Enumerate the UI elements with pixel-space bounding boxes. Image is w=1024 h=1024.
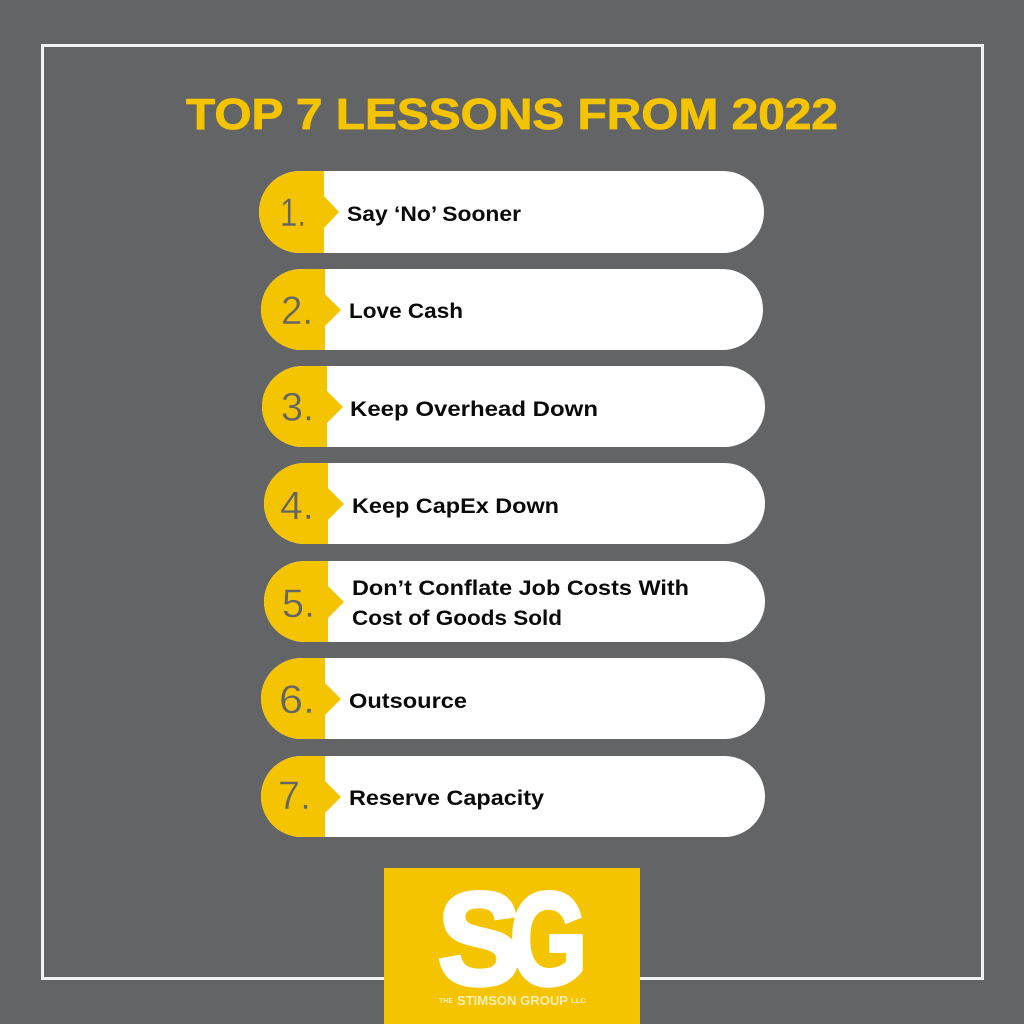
lesson 7: 7. (278, 774, 311, 818)
lesson 1: Say ‘No’ Sooner (347, 202, 522, 226)
lesson 6 (261, 658, 765, 739)
lesson 3: 3. (281, 386, 314, 430)
lesson 6: Outsource (349, 689, 467, 713)
lesson 2: 2. (281, 289, 313, 333)
logo wordmark: STIMSON GROUP (457, 993, 568, 1008)
logo monogram: S (438, 865, 521, 1012)
lesson 3: Keep Overhead Down (350, 397, 598, 421)
lesson 2: Love Cash (349, 299, 463, 323)
lesson 5: Cost of Goods Sold (352, 606, 562, 630)
lesson 5: 5. (282, 582, 315, 626)
title: TOP 7 LESSONS FROM 2022 (186, 90, 838, 139)
lesson 2 (261, 269, 763, 350)
lesson 5: Don’t Conflate Job Costs With (352, 576, 689, 600)
lesson 4: 4. (280, 484, 314, 528)
lesson 4: Keep CapEx Down (352, 494, 559, 518)
lesson 6: 6. (279, 678, 315, 722)
lesson list (259, 171, 765, 837)
logo wordmark: THE (439, 998, 453, 1005)
lesson 4 (264, 463, 765, 544)
logo wordmark: LLC (571, 998, 586, 1005)
lesson 7 (261, 756, 765, 837)
lesson 1: 1. (280, 191, 306, 235)
lesson 7: Reserve Capacity (349, 786, 544, 810)
logo block (384, 865, 640, 1024)
logo monogram: G (510, 865, 587, 1012)
logo monogram (438, 865, 587, 1012)
lesson 3 (262, 366, 765, 447)
lesson 5 (264, 561, 765, 642)
lesson 1 (259, 171, 764, 253)
